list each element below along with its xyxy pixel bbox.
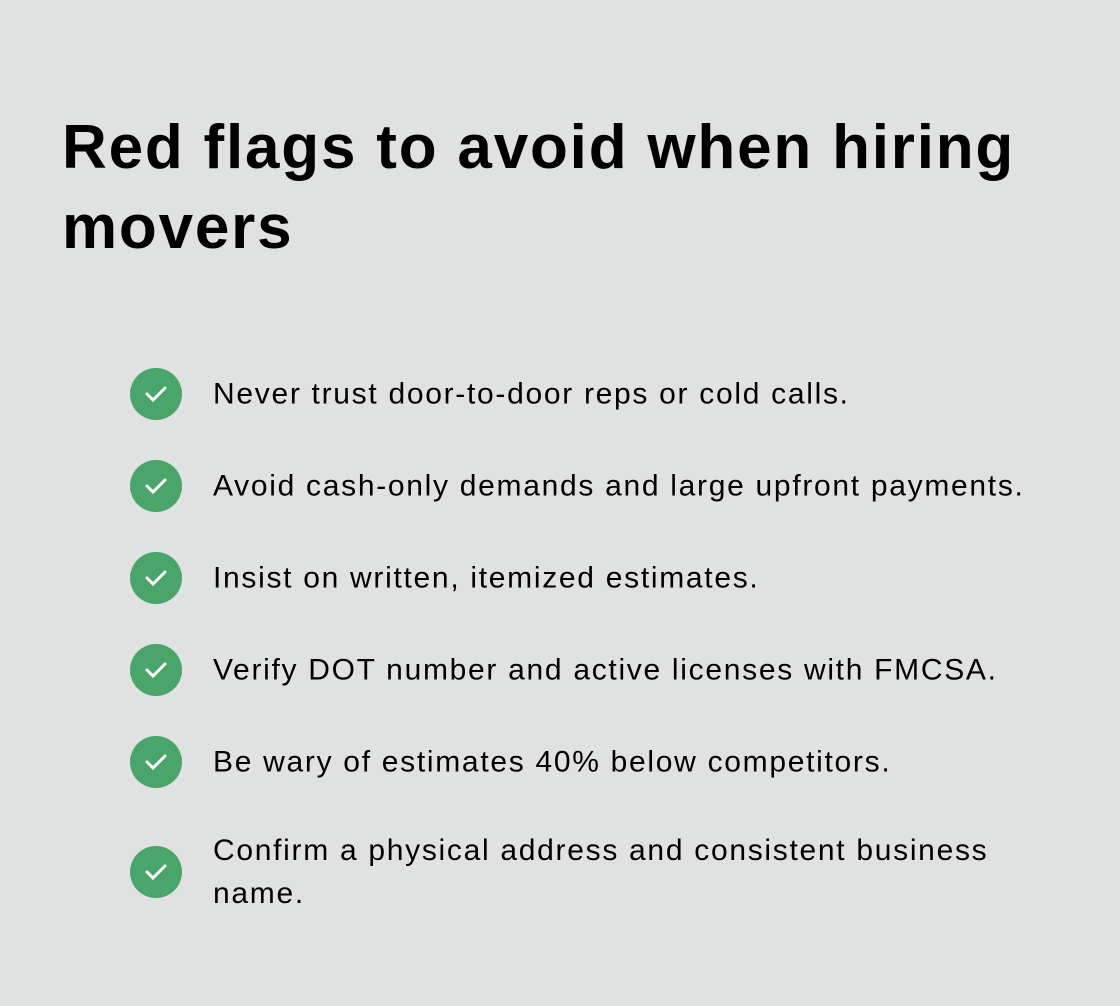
list item 5 [130,736,891,788]
list item 6: Confirm a physical address and consistent business name. [213,834,988,910]
list item 2 [130,460,1025,512]
title: Red flags to avoid when hiring movers [62,113,1015,262]
icon: check [130,368,182,420]
icon: check [130,460,182,512]
list item 1: Never trust door-to-door reps or cold calls. [213,378,850,410]
list item 4: Verify DOT number and active licenses with FMCSA. [213,654,998,686]
list item 3 [130,552,759,604]
icon: check [130,736,182,788]
list item 3: Insist on written, itemized estimates. [213,562,759,594]
list item 1 [130,368,850,420]
icon: check [130,846,182,898]
list item 4 [130,644,998,696]
icon: check [130,644,182,696]
icon: check [130,552,182,604]
list item 2: Avoid cash-only demands and large upfront payments. [213,470,1025,502]
list item 5: Be wary of estimates 40% below competitors. [213,746,891,778]
